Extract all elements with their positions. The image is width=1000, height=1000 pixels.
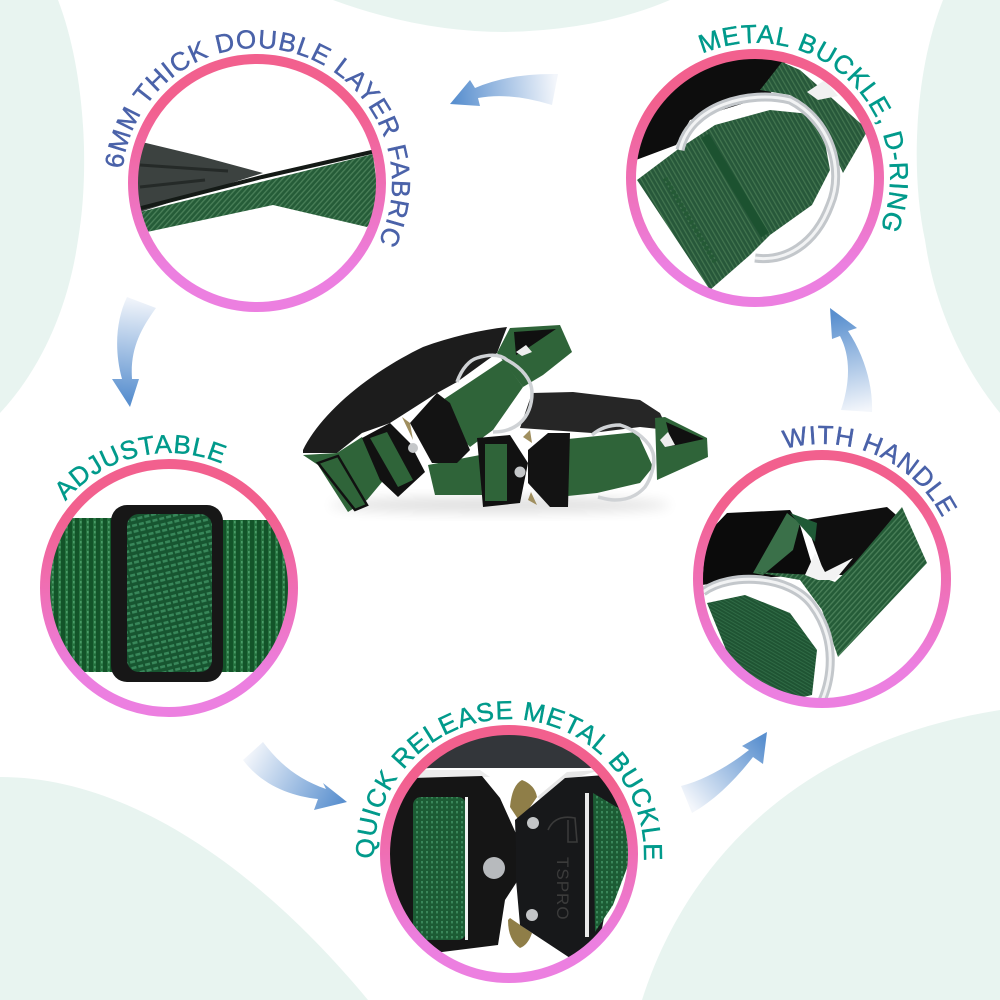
label: metal buckle, D-ring: METAL BUCKLE, D-RING — [698, 24, 908, 232]
photo: twisted strap — [135, 142, 380, 232]
photo: slider on strap — [45, 505, 292, 682]
panel: adjustable — [40, 434, 298, 717]
panel: metal buckle D-ring — [626, 24, 908, 307]
back collar — [303, 325, 572, 512]
logo mark — [548, 817, 577, 842]
center photo: two collars — [303, 325, 708, 513]
label: 6mm thick double layer fabric: 6MM THICK DOUBLE LAYER FABRIC — [106, 30, 410, 247]
panel: with handle — [693, 426, 958, 708]
ring — [631, 54, 879, 302]
photo: buckle — [390, 735, 630, 958]
front collar: buckle and strap — [477, 417, 708, 507]
photo: handle — [702, 507, 927, 705]
rivet: top — [527, 817, 539, 829]
ring — [45, 464, 293, 712]
rivet: bottom — [526, 909, 538, 921]
arrow: left, towards adjustable circle — [112, 297, 156, 407]
front collar: band behind — [428, 392, 668, 495]
brand text: TSPRO — [553, 857, 572, 921]
ring — [698, 455, 946, 703]
arrow: right, towards D-ring circle — [830, 308, 872, 412]
arrow: top, towards fabric circle — [450, 74, 558, 106]
ring — [385, 730, 633, 978]
ring — [133, 59, 381, 307]
label: with handle: WITH HANDLE — [781, 426, 958, 517]
arrow: bottom right, towards handle circle — [681, 732, 767, 813]
label: quick release metal buckle: QUICK RELEASE METAL BUCKLE — [356, 700, 662, 860]
label: adjustable: ADJUSTABLE — [57, 434, 227, 502]
arrow: bottom left, towards buckle circle — [243, 742, 347, 810]
panel: quick release metal buckle — [356, 700, 662, 983]
rivet: centre — [483, 857, 505, 879]
photo: D-ring — [636, 52, 868, 290]
panel: 6mm fabric — [106, 30, 410, 312]
